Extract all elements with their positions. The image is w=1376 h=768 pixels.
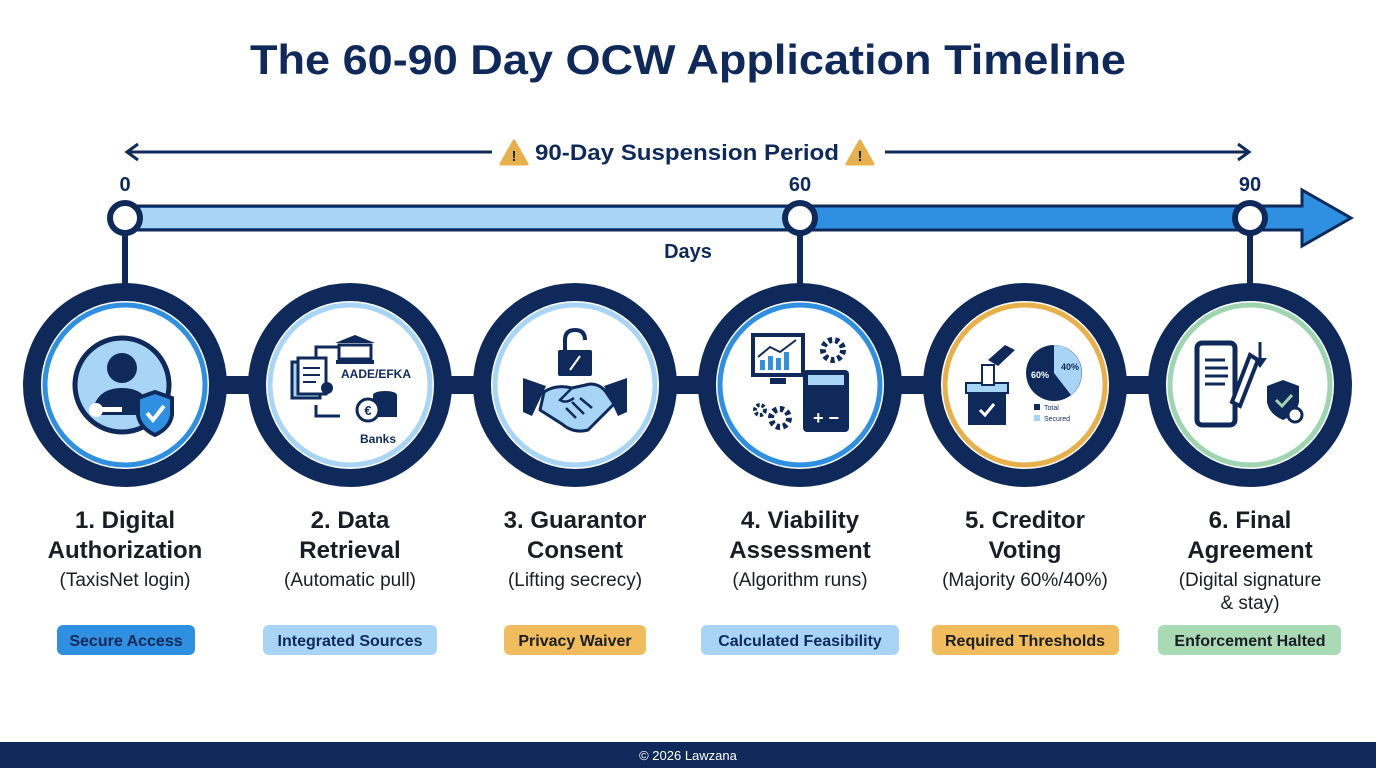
step titles: 4. Viability — [741, 507, 860, 534]
circle 2: data retrieval: Banks — [360, 432, 396, 446]
step titles: 3. Guarantor — [504, 507, 646, 534]
step titles: Voting — [989, 537, 1061, 564]
step titles: 5. Creditor — [965, 507, 1085, 534]
suspension period arrow: ! — [512, 148, 516, 165]
pills: Enforcement Halted — [1174, 633, 1326, 650]
circle 6: final agreement — [1157, 292, 1343, 478]
circle 2: data retrieval — [257, 292, 443, 478]
step subtitles: (Lifting secrecy) — [508, 570, 642, 591]
day labels: 90 — [1239, 174, 1261, 196]
step subtitles: (Majority 60%/40%) — [942, 570, 1108, 591]
step titles: Authorization — [48, 537, 202, 564]
circle 2: data retrieval: AADE/EFKA — [341, 367, 411, 381]
circle 5: creditor voting: 60% — [1031, 370, 1049, 380]
footer — [0, 742, 1376, 768]
connectors between circles — [200, 376, 1200, 394]
footer: © 2026 Lawzana — [639, 748, 738, 763]
circle 4: viability assessment: + − — [813, 408, 839, 428]
pills: Integrated Sources — [278, 633, 423, 650]
circle 5: creditor voting: Secured — [1044, 416, 1070, 423]
day labels — [119, 174, 1261, 263]
suspension period arrow: ! — [858, 148, 862, 165]
title: The 60-90 Day OCW Application Timeline — [250, 36, 1126, 83]
circle 5: creditor voting: Total — [1044, 405, 1059, 412]
pills: Calculated Feasibility — [718, 633, 882, 650]
pills: Secure Access — [69, 633, 183, 650]
step subtitles: (Automatic pull) — [284, 570, 416, 591]
suspension period arrow: 90-Day Suspension Period — [535, 140, 839, 165]
step titles: Retrieval — [299, 537, 401, 564]
pills: Privacy Waiver — [518, 633, 632, 650]
step titles: 2. Data — [311, 507, 390, 534]
circle 2: data retrieval: € — [364, 403, 372, 418]
day labels: 60 — [789, 174, 811, 196]
pills: Required Thresholds — [945, 633, 1105, 650]
step subtitles: & stay) — [1220, 593, 1280, 614]
suspension period arrow — [127, 140, 1249, 165]
step subtitles: (Digital signature — [1179, 570, 1321, 591]
day labels: 0 — [119, 174, 131, 196]
step titles: Assessment — [729, 537, 871, 564]
timeline bar — [110, 190, 1351, 300]
step titles — [48, 507, 1313, 564]
circle 4: viability assessment — [707, 292, 893, 478]
day labels: Days — [664, 241, 712, 263]
pills — [57, 625, 1341, 655]
step titles: Consent — [527, 537, 623, 564]
circle 5: creditor voting: 40% — [1061, 362, 1079, 372]
step titles: 6. Final — [1209, 507, 1291, 534]
circle 1: digital authorization — [32, 292, 218, 478]
circle 5: creditor voting — [932, 292, 1118, 478]
step titles: Agreement — [1187, 537, 1313, 564]
step subtitles: (Algorithm runs) — [732, 570, 868, 591]
step subtitles: (TaxisNet login) — [60, 570, 190, 591]
step subtitles — [60, 570, 1321, 614]
step titles: 1. Digital — [75, 507, 175, 534]
circle 3: guarantor consent — [482, 292, 668, 478]
